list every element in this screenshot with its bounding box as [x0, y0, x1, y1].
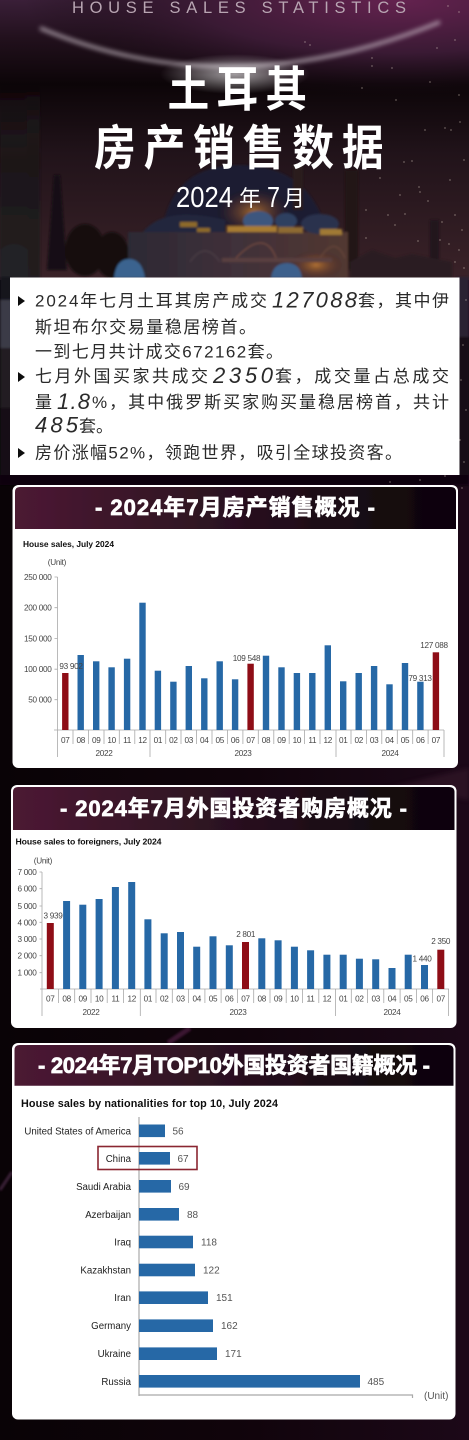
bar chart: nationalities [24, 1117, 448, 1402]
subtitle: date: 2024 [176, 182, 233, 214]
subtitle: date: 年 [239, 186, 261, 211]
bar chart: foreign sales: 7 000 [18, 868, 37, 877]
bar chart: house sales: 07 [432, 736, 441, 745]
bar chart: house sales: 05 [401, 736, 410, 745]
bar chart: nationalities: 151 [216, 1293, 233, 1304]
bar chart: house sales: 08 [76, 736, 86, 745]
bar chart: foreign sales: 5 000 [18, 902, 37, 911]
bar chart: nationalities: 69 [178, 1182, 190, 1193]
bar chart: house sales: 07 [246, 736, 256, 745]
bar chart: house sales: 2022 [95, 749, 113, 758]
bar chart: nationalities: 162 [221, 1321, 238, 1332]
bar chart: foreign sales: 2 350 [431, 937, 451, 946]
chart title: House sales by nationalities for top 10, July 2024 [21, 1098, 278, 1110]
summary line 1: 127088 [272, 288, 358, 312]
title [94, 62, 391, 175]
bar chart: nationalities: United States of America [24, 1126, 132, 1138]
bar chart: house sales: 100 000 [24, 665, 52, 674]
bar chart: house sales: 02 [169, 736, 178, 745]
icon: bullet 2 [18, 372, 25, 382]
bar chart: house sales: 08 [262, 736, 271, 745]
bar chart: foreign sales: 2023 [229, 1008, 247, 1017]
bar chart: foreign sales: 08 [62, 994, 72, 1004]
summary line 7: 房价涨幅52%，领跑世界，吸引全球投资客。 [35, 444, 402, 462]
panel: key summary [10, 278, 460, 475]
bar chart: nationalities: Kazakhstan [80, 1266, 131, 1276]
bar chart: nationalities: 88 [187, 1210, 199, 1221]
bar chart: house sales: 2023 [234, 749, 252, 758]
bar chart: foreign sales: 08 [258, 994, 267, 1004]
bar chart: house sales: 04 [200, 736, 209, 745]
bar chart: nationalities: 67 [178, 1154, 189, 1165]
summary line 5: 量 [35, 393, 52, 412]
bar chart: foreign sales: 03 [176, 994, 185, 1004]
bar chart: house sales: 250 000 [24, 573, 52, 582]
bar chart: house sales: 150 000 [24, 634, 52, 644]
bar chart: nationalities: (Unit) [424, 1391, 448, 1402]
bar chart: nationalities: 171 [225, 1349, 242, 1360]
bar chart: nationalities: Iran [114, 1293, 131, 1304]
bar chart: foreign sales: 06 [225, 994, 234, 1004]
bar chart: house sales: 11 [123, 736, 132, 745]
bar chart: foreign sales: 2022 [82, 1008, 100, 1017]
bar chart: house sales: 10 [293, 736, 302, 745]
bar chart: house sales: 01 [339, 736, 348, 745]
bar chart: house sales: 200 000 [24, 604, 52, 613]
panel: house sales chart [12, 485, 458, 768]
summary line 1: 套，其中伊 [358, 292, 449, 310]
heading: top 10 nationalities [14, 1045, 454, 1086]
summary line 1: 2024年七月土耳其房产成交 [35, 292, 267, 310]
bar chart: house sales: 05 [215, 736, 225, 745]
heading: house sales [15, 487, 456, 529]
bar chart: house sales: 127 088 [420, 641, 448, 650]
bar chart: foreign sales: 10 [290, 994, 299, 1004]
bar chart: house sales: 12 [138, 736, 147, 745]
summary line 4: 2350 [212, 363, 274, 388]
subtitle: date: 月 [283, 186, 305, 211]
bar chart: nationalities: Germany [91, 1321, 131, 1332]
bar chart: foreign sales: 4 000 [18, 918, 37, 927]
bar chart: foreign sales: 07 [437, 994, 446, 1004]
bar chart: nationalities: Azerbaijan [85, 1210, 131, 1221]
icon: bullet 1 [18, 296, 25, 306]
summary line 5 [35, 389, 449, 414]
bar chart: house sales: 2024 [381, 749, 399, 758]
bar chart: foreign sales [18, 856, 451, 1017]
bar chart: foreign sales: 09 [79, 994, 88, 1004]
subtitle: date [176, 182, 305, 214]
subtitle: date: 7 [267, 182, 280, 214]
heading: foreign sales: - 2024年7月外国投资者购房概况 - [60, 796, 407, 821]
summary line 3: 一到七月共计成交672162套。 [35, 342, 283, 362]
bar chart: house sales: 03 [370, 736, 379, 745]
bar chart: foreign sales: 07 [241, 994, 250, 1004]
bar chart: house sales: 01 [154, 736, 163, 745]
bar chart: foreign sales: 2 801 [236, 930, 256, 939]
bar chart: house sales: 11 [308, 736, 317, 745]
bar chart: foreign sales: 10 [95, 994, 104, 1004]
summary line 2: 斯坦布尔交易量稳居榜首。 [35, 318, 256, 337]
bar chart: foreign sales: 2024 [383, 1008, 401, 1017]
bar chart: house sales: 02 [354, 736, 364, 745]
bar chart: foreign sales: 2 000 [18, 952, 37, 961]
title: 土耳其 [168, 62, 314, 117]
bar chart: house sales: 09 [92, 736, 101, 745]
bar chart: foreign sales: (Unit) [34, 856, 53, 866]
heading: foreign sales [13, 787, 454, 830]
bar chart: foreign sales: 04 [192, 994, 202, 1004]
summary line 6: 套。 [79, 417, 113, 436]
bar chart: nationalities: 122 [203, 1266, 220, 1276]
title: 房产销售数据 [94, 121, 391, 175]
bar chart: nationalities: 56 [172, 1126, 184, 1138]
bar chart: foreign sales: 11 [307, 994, 315, 1004]
bar chart: foreign sales: 1 000 [18, 969, 37, 978]
bar chart: nationalities: China [106, 1154, 132, 1165]
chart title: House sales, July 2024 [23, 539, 114, 549]
summary line 1 [35, 288, 449, 312]
bar chart: house sales: 09 [277, 736, 286, 745]
summary line 5: 1.8 [57, 389, 91, 414]
bar chart: house sales: 93 902 [59, 662, 83, 671]
bar chart: house sales: 50 000 [28, 696, 52, 705]
panel: foreign sales chart [11, 785, 456, 1028]
summary line 4: 套，成交量占总成交 [275, 367, 449, 386]
bar chart: house sales: 12 [324, 736, 333, 745]
bar chart: foreign sales: 05 [209, 994, 218, 1004]
bar chart: nationalities: 118 [201, 1238, 217, 1248]
callout: China highlight box [98, 1146, 197, 1170]
summary line 5: %，其中俄罗斯买家购买量稳居榜首，共计 [92, 393, 449, 412]
bar chart: nationalities: 485 [368, 1377, 385, 1388]
icon: bullet 3 [18, 448, 25, 458]
bar chart: foreign sales: 3 000 [18, 935, 37, 944]
bar chart: house sales [24, 558, 448, 758]
bar chart: foreign sales: 03 [371, 994, 381, 1004]
bar chart: house sales: 07 [61, 736, 70, 745]
chart title: House sales to foreigners, July 2024 [16, 836, 162, 846]
bar chart: house sales: 06 [416, 736, 425, 745]
bar chart: nationalities: Ukraine [98, 1349, 131, 1360]
bar chart: foreign sales: 1 440 [412, 955, 432, 964]
bar chart: foreign sales: 02 [355, 994, 364, 1004]
heading: top 10 nationalities: - 2024年7月TOP10外国投资者国籍概况 - [38, 1053, 430, 1078]
bar chart: house sales: 03 [185, 736, 194, 745]
bar chart: house sales: 04 [385, 736, 394, 745]
bar chart: house sales: 109 548 [233, 654, 261, 663]
bar chart: foreign sales: 07 [46, 994, 55, 1004]
heading: house sales: - 2024年7月房产销售概况 - [95, 495, 375, 520]
bar chart: nationalities: Iraq [114, 1238, 131, 1248]
summary line 6: 485 [35, 412, 79, 438]
bar chart: house sales: 06 [231, 736, 240, 745]
bar chart: nationalities: Russia [101, 1377, 132, 1388]
bar chart: foreign sales: 6 000 [18, 885, 37, 894]
bar chart: foreign sales: 11 [111, 994, 120, 1004]
summary line 4: 七月外国买家共成交 [35, 367, 208, 386]
bar chart: foreign sales: 05 [404, 994, 413, 1004]
bar chart: house sales: 79 313 [408, 674, 432, 683]
bar chart: foreign sales: 04 [388, 994, 397, 1004]
bar chart: foreign sales: 12 [323, 994, 332, 1004]
bar chart: foreign sales: 01 [144, 994, 153, 1004]
bar chart: nationalities: Saudi Arabia [76, 1182, 132, 1193]
bar chart: foreign sales: 3 939 [44, 912, 63, 920]
bar chart: house sales: 10 [107, 736, 117, 745]
summary line 4 [35, 363, 449, 388]
panel: top 10 nationalities chart [12, 1043, 456, 1420]
bar chart: foreign sales: 06 [420, 994, 429, 1004]
bar chart: foreign sales: 02 [160, 994, 169, 1004]
bar chart: house sales: (Unit) [48, 558, 67, 567]
bar chart: foreign sales: 01 [339, 994, 348, 1004]
summary line 6 [35, 412, 113, 438]
bar chart: foreign sales: 12 [127, 994, 137, 1004]
bar chart: foreign sales: 09 [274, 994, 283, 1004]
